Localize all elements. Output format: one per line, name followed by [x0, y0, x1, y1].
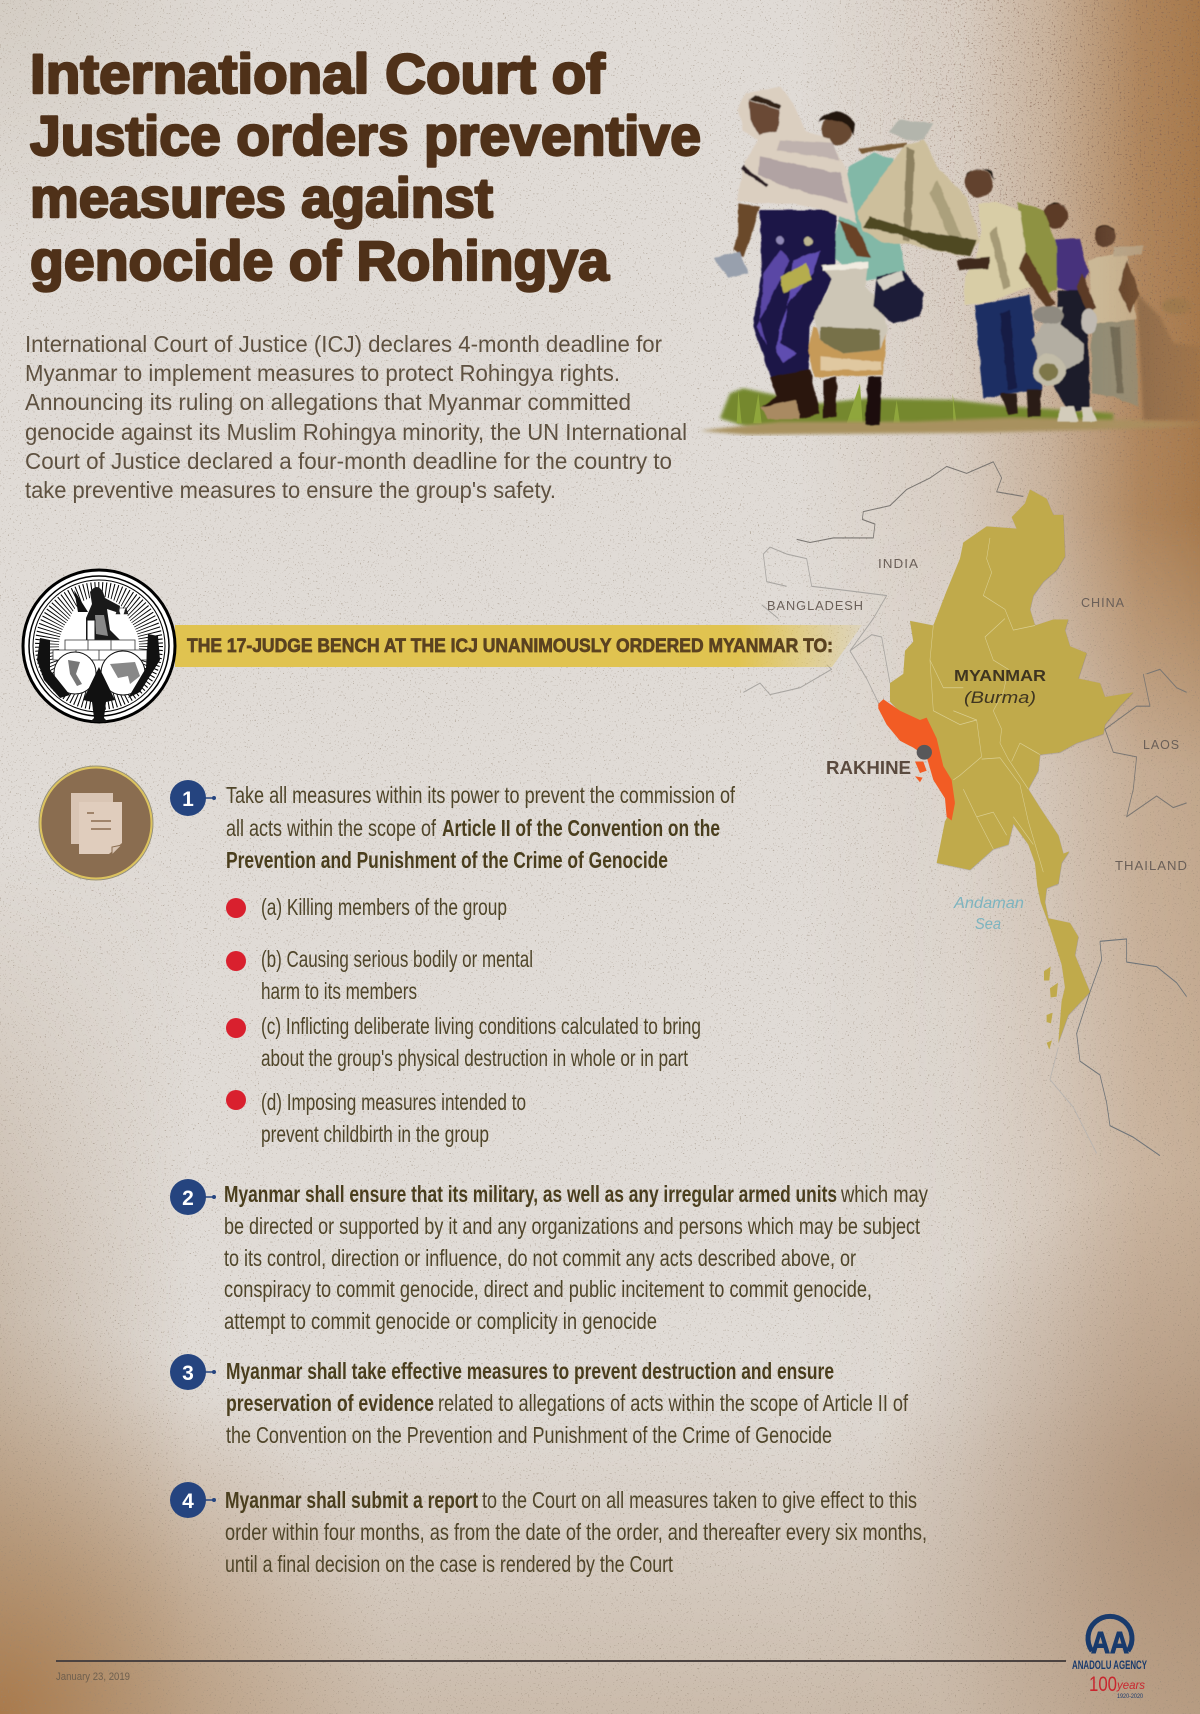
number badge 1: 1 [182, 788, 194, 811]
item 2 text: conspiracy to commit genocide, direct and public incitement to commit genocide, [224, 1276, 872, 1302]
item 3 text: preservation of evidence [226, 1390, 434, 1416]
title: International Court of [30, 42, 605, 105]
map labels: CHINA [1081, 595, 1125, 610]
man at rear [1088, 225, 1143, 407]
item 4 text: order within four months, as from the date of the order, and thereafter every six months, [225, 1519, 927, 1545]
title [30, 42, 701, 292]
map labels: THAILAND [1115, 858, 1188, 873]
map labels [767, 556, 1188, 933]
banner: bench ruling: THE 17-JUDGE BENCH AT THE ICJ UNANIMOUSLY ORDERED MYANMAR TO: [187, 636, 833, 657]
man in cream shirt and blue longyi [957, 168, 1055, 417]
map of Myanmar region [743, 462, 1187, 1156]
neighbouring country borders [743, 462, 1187, 1156]
map labels: RAKHINE [826, 758, 911, 778]
title: Justice orders preventive [30, 104, 701, 167]
item 2 text [224, 1181, 928, 1334]
logo: Anadolu Agency: years [1116, 1678, 1145, 1692]
intro paragraph: Court of Justice declared a four-month deadline for the country to [25, 448, 672, 474]
map labels: MYANMAR [954, 668, 1046, 685]
item 4 text: until a final decision on the case is rendered by the Court [225, 1551, 673, 1577]
grass and ground [700, 383, 1200, 435]
intro paragraph: take preventive measures to ensure the group's safety. [25, 477, 556, 503]
item 2 text: Myanmar shall ensure that its military, as well as any irregular armed units [224, 1181, 837, 1207]
intro paragraph: Announcing its ruling on allegations that Myanmar committed [25, 389, 631, 415]
internal state borders [930, 538, 1043, 872]
intro paragraph: International Court of Justice (ICJ) declares 4-month deadline for [25, 331, 662, 357]
number badge 2 [170, 1179, 216, 1215]
number badge 1 [170, 780, 216, 816]
number badge 2: 2 [182, 1187, 194, 1210]
map labels: Andaman [953, 895, 1024, 912]
Rakhine location marker [917, 745, 932, 760]
logo: Anadolu Agency: AA [1091, 1625, 1129, 1660]
Rakhine state highlight [878, 699, 955, 820]
item 2 text: which may [840, 1181, 928, 1207]
woman in shawl [713, 87, 872, 419]
item 1 text: Take all measures within its power to prevent the commission of [226, 782, 735, 808]
sub-list a to d: (c) Inflicting deliberate living conditions calculated to bring [261, 1013, 701, 1039]
number badge 4: 4 [182, 1490, 194, 1513]
sub-list a to d: prevent childbirth in the group [261, 1121, 489, 1147]
title: measures against [30, 166, 493, 229]
item 3 text: related to allegations of acts within the scope of Article II of [438, 1390, 908, 1416]
item 3 text: Myanmar shall take effective measures to prevent destruction and ensure [226, 1358, 834, 1384]
item 4 text [225, 1487, 927, 1577]
far background figures [1137, 293, 1200, 420]
sub-list a to d [226, 894, 701, 1147]
item 1 text: all acts within the scope of [226, 815, 436, 841]
item 1 text: Article II of the Convention on the [442, 815, 720, 841]
item 2 text: be directed or supported by it and any organizations and persons which may be subject [224, 1213, 920, 1239]
person with bag on pole [818, 111, 907, 425]
clay pots [1032, 306, 1097, 386]
intro paragraph: genocide against its Muslim Rohingya minority, the UN International [25, 419, 687, 445]
number badge 4 [170, 1482, 216, 1518]
sub-list a to d: about the group's physical destruction in whole or in part [261, 1045, 688, 1071]
map labels: BANGLADESH [767, 598, 864, 613]
item 4 text: to the Court on all measures taken to give effect to this [482, 1487, 917, 1513]
intro paragraph [25, 331, 687, 503]
banner: bench ruling [175, 625, 862, 667]
sub-list a to d: (b) Causing serious bodily or mental [261, 946, 533, 972]
footer rule and date: January 23, 2019 [56, 1671, 130, 1683]
item 3 text: the Convention on the Prevention and Punishment of the Crime of Genocide [226, 1422, 832, 1448]
number badge 3 [170, 1354, 216, 1390]
item 1 text [226, 782, 735, 873]
item 4 text: Myanmar shall submit a report [225, 1487, 478, 1513]
Andaman coastal islands [1044, 967, 1058, 1050]
icon: ICJ seal [23, 570, 175, 722]
man in purple shirt [1017, 202, 1097, 422]
title: genocide of Rohingya [30, 229, 610, 292]
sub-list a to d: (d) Imposing measures intended to [261, 1089, 526, 1115]
item 2 text: attempt to commit genocide or complicity in genocide [224, 1308, 657, 1334]
map labels: Sea [975, 916, 1001, 933]
sub-list a to d: harm to its members [261, 978, 417, 1004]
map labels: LAOS [1143, 737, 1180, 752]
intro paragraph: Myanmar to implement measures to protect Rohingya rights. [25, 360, 620, 386]
logo: Anadolu Agency [1072, 1616, 1147, 1700]
item 2 text: to its control, direction or influence, do not commit any acts described above, or [224, 1245, 856, 1271]
map labels: INDIA [878, 556, 919, 571]
sub-list a to d: (a) Killing members of the group [261, 894, 507, 920]
logo: Anadolu Agency: 100 [1089, 1673, 1117, 1696]
logo: Anadolu Agency: 1920-2020 [1117, 1694, 1144, 1700]
item 1 text: Prevention and Punishment of the Crime of Genocide [226, 847, 668, 873]
map labels: (Burma) [964, 688, 1036, 707]
logo: Anadolu Agency: ANADOLU AGENCY [1072, 1658, 1147, 1672]
number badge 3: 3 [182, 1362, 194, 1385]
icon: documents [39, 766, 153, 880]
item 3 text [226, 1358, 908, 1448]
water pot in woman's arm [808, 262, 923, 377]
large cloth bundle [857, 120, 980, 257]
illustration: Rohingya refugees walking with belongings [700, 87, 1200, 435]
Myanmar country shape [890, 489, 1133, 1043]
